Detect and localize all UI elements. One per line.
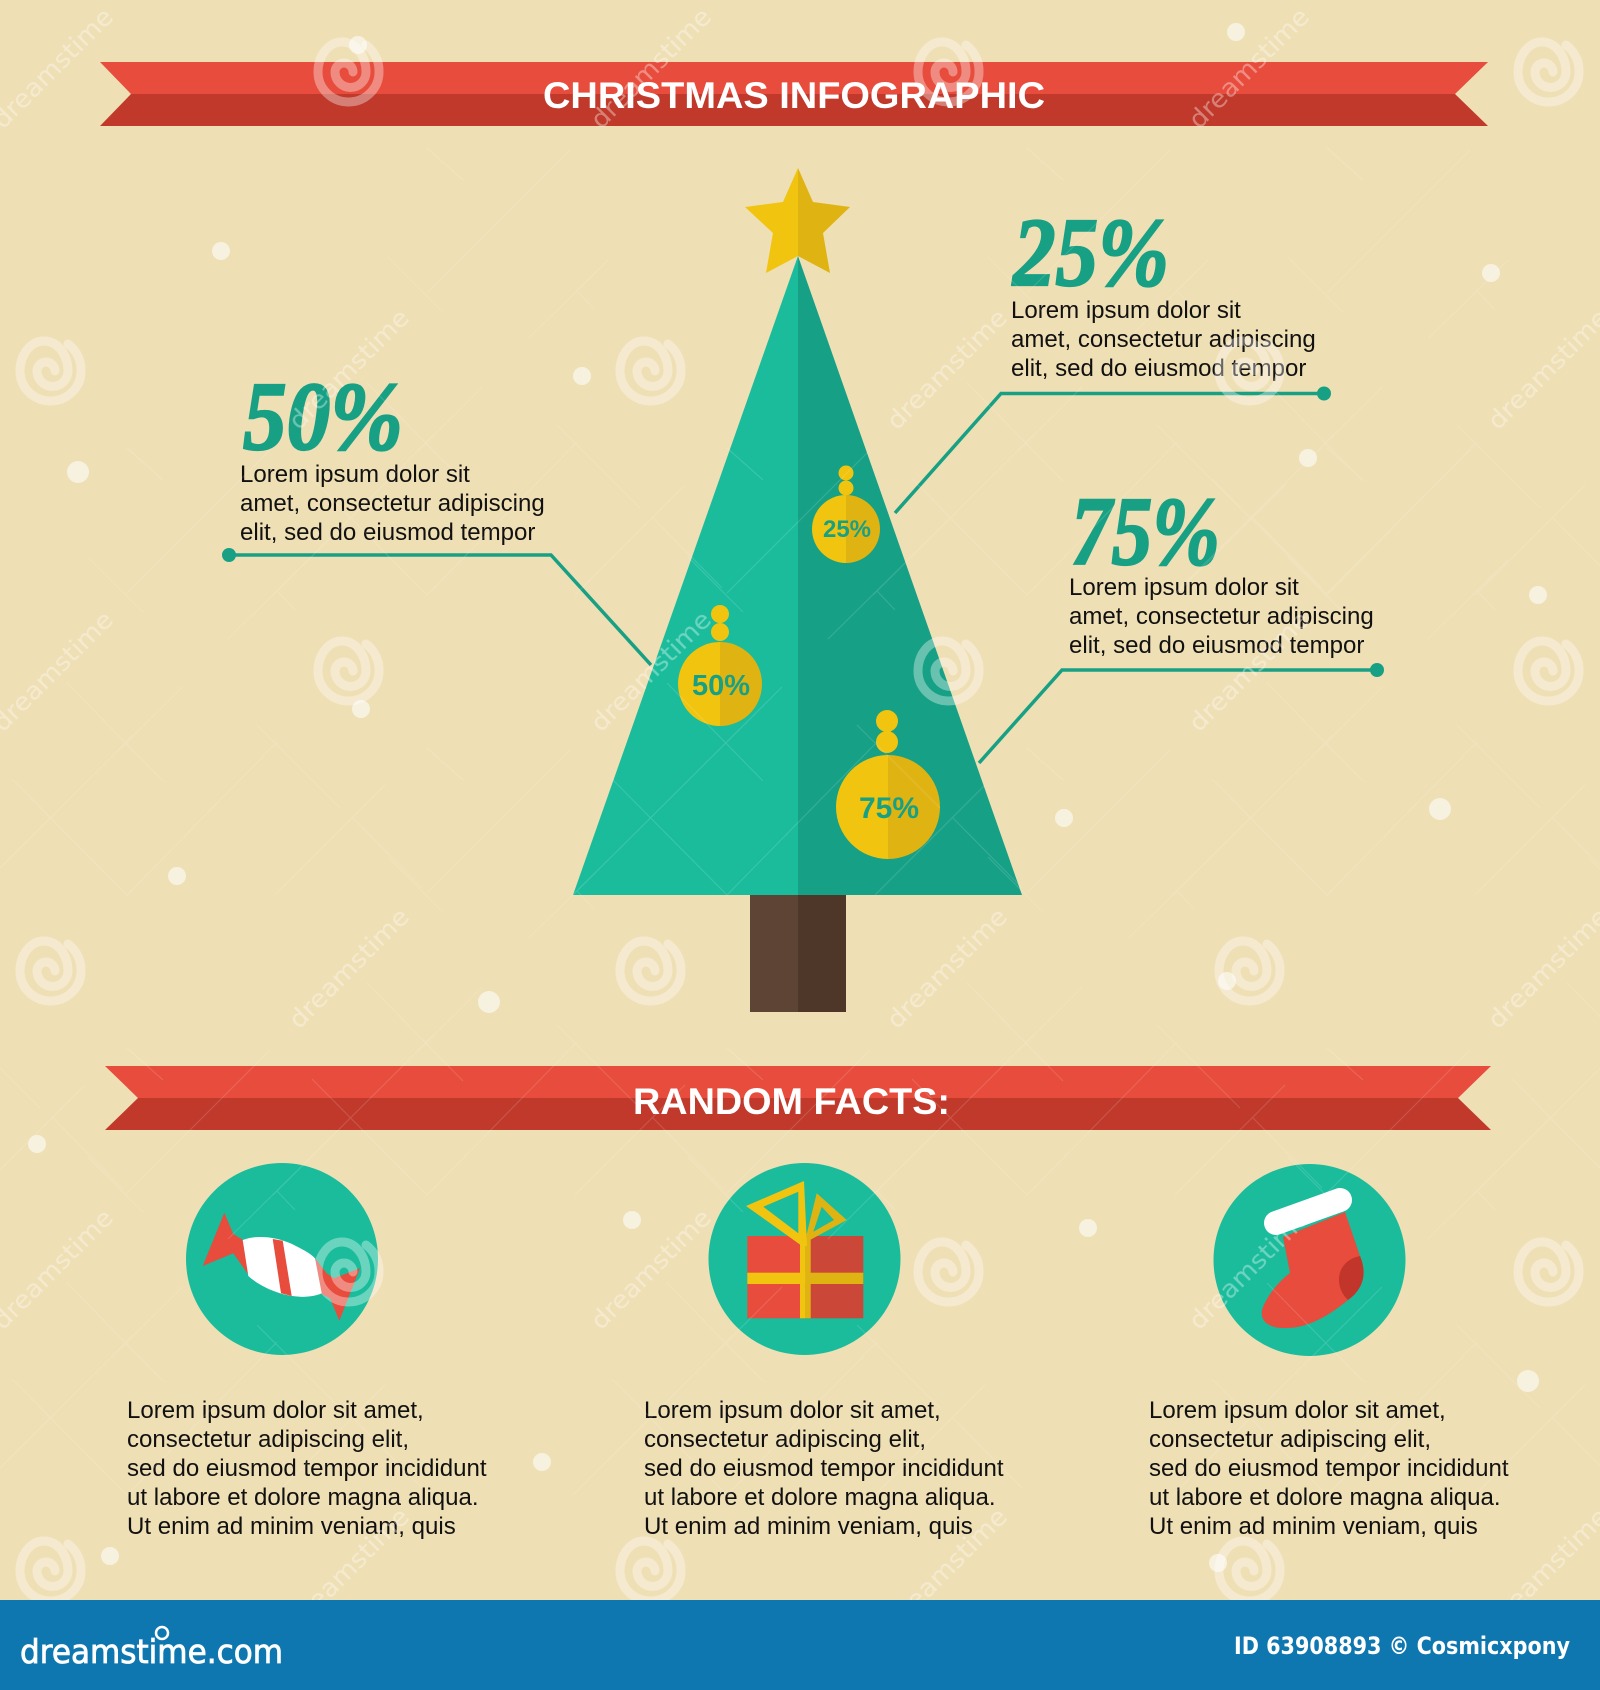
text 75%: Lorem ipsum dolor sit	[1069, 574, 1299, 601]
footer bar	[0, 1600, 1600, 1690]
text 25%: amet, consectetur adipiscing	[1011, 326, 1316, 353]
text 75%	[1069, 574, 1374, 659]
footer logo: dreamstime.com	[20, 1632, 283, 1671]
text 25%	[1011, 297, 1316, 382]
title: CHRISTMAS INFOGRAPHIC	[543, 75, 1045, 116]
fact text 2: consectetur adipiscing elit,	[644, 1426, 926, 1453]
callout 75%	[979, 478, 1384, 763]
watermark text: dreamstime	[283, 303, 415, 435]
fact text 3: Ut enim ad minim veniam, quis	[1149, 1513, 1478, 1540]
fact text 2: sed do eiusmod tempor incididunt	[644, 1455, 1004, 1482]
ornament 25%: 25%	[823, 516, 871, 543]
watermark text: dreamstime	[283, 1502, 415, 1634]
ornament 50%	[678, 605, 762, 726]
watermark text: dreamstime	[585, 1203, 717, 1335]
ornament 25%	[812, 466, 880, 563]
icon: gift	[708, 1163, 900, 1355]
fact text 3	[1149, 1397, 1509, 1540]
section heading: RANDOM FACTS:	[633, 1081, 950, 1122]
fact text 3: sed do eiusmod tempor incididunt	[1149, 1455, 1509, 1482]
text 75%: amet, consectetur adipiscing	[1069, 603, 1374, 630]
fact text 2: Ut enim ad minim veniam, quis	[644, 1513, 973, 1540]
watermark text: dreamstime	[881, 902, 1013, 1034]
christmas tree	[573, 168, 1022, 1012]
number 25%: 25%	[1011, 199, 1169, 306]
leader line 25%	[895, 386, 1331, 513]
text 50%: amet, consectetur adipiscing	[240, 490, 545, 517]
fact text 3: ut labore et dolore magna aliqua.	[1149, 1484, 1501, 1511]
watermark text: dreamstime	[1183, 605, 1315, 737]
text 25%: elit, sed do eiusmod tempor	[1011, 355, 1306, 382]
tree trunk	[750, 895, 846, 1012]
footer logo swirl	[156, 1627, 168, 1639]
watermark text: dreamstime	[585, 2, 717, 134]
icon: stocking	[1214, 1164, 1406, 1356]
fact text 3: consectetur adipiscing elit,	[1149, 1426, 1431, 1453]
fact text 1: ut labore et dolore magna aliqua.	[127, 1484, 479, 1511]
watermark text: dreamstime	[881, 1502, 1013, 1634]
watermark text: dreamstime	[881, 303, 1013, 435]
watermark lattice lines	[0, 148, 1600, 1495]
callout 50%	[222, 363, 651, 665]
number 75%: 75%	[1071, 478, 1220, 585]
ornament 75%	[836, 710, 940, 859]
fact text 1: Ut enim ad minim veniam, quis	[127, 1513, 456, 1540]
fact text 2	[644, 1397, 1004, 1540]
text 50%: Lorem ipsum dolor sit	[240, 461, 470, 488]
tree foliage	[573, 256, 1022, 895]
text 50%: elit, sed do eiusmod tempor	[240, 519, 535, 546]
icon: candy	[186, 1163, 378, 1355]
star	[745, 168, 850, 273]
leader line 50%	[222, 548, 651, 665]
watermark text: dreamstime	[1183, 2, 1315, 134]
ornament 50%: 50%	[692, 670, 750, 702]
text 75%: elit, sed do eiusmod tempor	[1069, 632, 1364, 659]
text 50%	[240, 461, 545, 546]
fact text 3: Lorem ipsum dolor sit amet,	[1149, 1397, 1446, 1424]
fact text 1: consectetur adipiscing elit,	[127, 1426, 409, 1453]
fact text 1: Lorem ipsum dolor sit amet,	[127, 1397, 424, 1424]
watermark text: dreamstime	[283, 902, 415, 1034]
random facts ribbon	[105, 1066, 1491, 1130]
fact text 2: Lorem ipsum dolor sit amet,	[644, 1397, 941, 1424]
watermark text: dreamstime	[585, 605, 717, 737]
fact text 1	[127, 1397, 487, 1540]
leader line 75%	[979, 663, 1384, 763]
watermark text: dreamstime	[1183, 1203, 1315, 1335]
number 50%: 50%	[243, 363, 403, 470]
ornament 75%: 75%	[859, 792, 919, 825]
top ribbon banner	[100, 62, 1488, 126]
fact text 2: ut labore et dolore magna aliqua.	[644, 1484, 996, 1511]
text 25%: Lorem ipsum dolor sit	[1011, 297, 1241, 324]
fact text 1: sed do eiusmod tempor incididunt	[127, 1455, 487, 1482]
callout 25%	[895, 199, 1331, 513]
